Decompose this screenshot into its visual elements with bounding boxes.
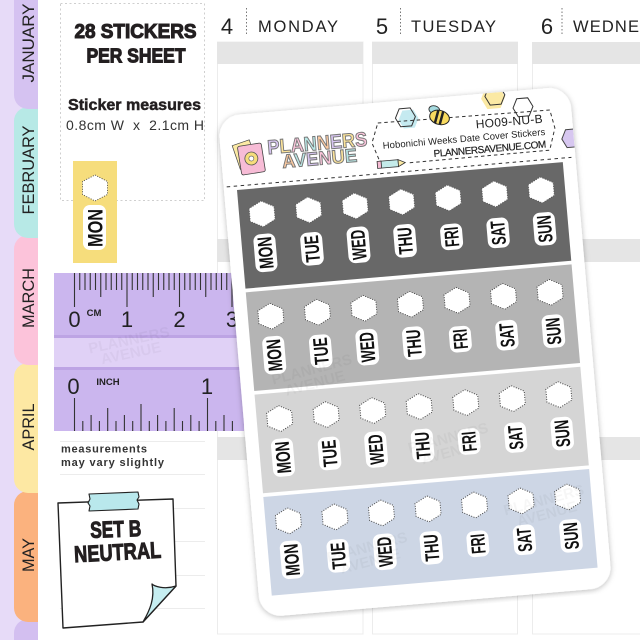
sticker MON xyxy=(275,507,306,580)
sticker SAT xyxy=(508,487,538,556)
sticker MON: MON xyxy=(254,236,279,270)
column: Tuesday: 5 xyxy=(376,14,388,39)
sticker MON: MON xyxy=(272,440,296,474)
sticker THU: THU xyxy=(411,431,436,460)
sticker FRI xyxy=(435,184,465,251)
sticker THU xyxy=(414,495,445,565)
icon: pencil xyxy=(377,159,406,168)
sticker SAT xyxy=(490,282,521,351)
icon: purple hexagon xyxy=(561,128,575,148)
sticker THU: THU xyxy=(420,533,444,562)
sticker SUN xyxy=(545,381,576,451)
sticker SUN: SUN xyxy=(560,521,584,550)
watermarks: AVENUE xyxy=(515,498,579,530)
inch numbers: 0 xyxy=(67,374,80,399)
centimetre numbers xyxy=(68,307,238,332)
heading: stickers per sheet: PER SHEET xyxy=(86,46,186,68)
tab: May xyxy=(14,491,38,622)
sticker SUN xyxy=(528,176,559,246)
tab: April: APRIL xyxy=(19,404,38,450)
sticker WED: WED xyxy=(374,536,398,568)
centimetre numbers: 2 xyxy=(173,307,186,332)
sticker SUN: SUN xyxy=(551,419,575,448)
sidebar background xyxy=(0,0,38,640)
watermarks: PLANNERS xyxy=(406,420,490,457)
watermarks: AVENUE xyxy=(283,368,347,400)
strip 2: mid grey xyxy=(246,264,580,391)
strip 3: light grey xyxy=(255,367,589,493)
inch numbers: 1 xyxy=(201,374,213,399)
product code: HO09-NU-B xyxy=(475,112,543,131)
watermarks: AVENUE xyxy=(339,545,402,578)
sticker FRI xyxy=(452,389,483,456)
sticker SUN: SUN xyxy=(542,317,567,345)
tab: February: FEBRUARY xyxy=(19,126,38,214)
watermarks: PLANNERS xyxy=(502,482,586,519)
sticker SAT: SAT xyxy=(505,425,529,450)
sheet header xyxy=(226,92,575,188)
sticker TUE: TUE xyxy=(310,337,334,365)
sticker TUE: TUE xyxy=(301,234,325,263)
sticker MON xyxy=(257,302,288,375)
centimetre numbers: 0 xyxy=(68,307,81,332)
sticker THU xyxy=(397,290,428,361)
inch ticks xyxy=(74,398,232,431)
sticker THU xyxy=(388,188,419,258)
tab: March: MARCH xyxy=(19,268,38,328)
note text: SET B xyxy=(90,515,142,543)
column: Monday xyxy=(217,8,363,634)
watermarks: PLANNERS xyxy=(270,351,354,389)
logo wordmark xyxy=(268,132,368,168)
text: sticker measures: Sticker measures xyxy=(68,97,201,114)
logo wordmark: AVENUE xyxy=(281,146,358,173)
column: Tuesday: TUESDAY xyxy=(411,18,496,36)
sample sticker xyxy=(73,161,117,263)
planner columns xyxy=(217,8,640,634)
column: Monday: MONDAY xyxy=(258,18,338,36)
label: INCH: INCH xyxy=(96,377,120,388)
sticky note xyxy=(58,492,176,628)
sticker SAT xyxy=(481,180,512,249)
sticker FRI: FRI xyxy=(458,431,482,452)
icon: blue hexagon xyxy=(395,107,419,129)
icon: notebook xyxy=(232,138,266,176)
sticker WED: WED xyxy=(356,331,381,363)
sticker THU: THU xyxy=(403,329,427,357)
sticker SAT: SAT xyxy=(496,322,520,348)
sticker MON xyxy=(266,405,297,477)
icon: outline hexagon xyxy=(512,97,534,117)
tab: February xyxy=(14,107,38,238)
month tabs xyxy=(14,0,38,640)
sticker WED xyxy=(350,294,381,366)
sticker TUE xyxy=(313,401,343,471)
tab: June xyxy=(14,619,38,640)
icon: bee xyxy=(428,105,450,126)
watermark: AVENUE xyxy=(99,339,163,368)
sticker MON: MON xyxy=(263,338,288,372)
product name: Hobonichi Weeks Date Cover Stickers xyxy=(382,127,546,152)
sticker TUE: TUE xyxy=(318,439,343,468)
sticker SAT xyxy=(499,385,529,454)
sticker FRI xyxy=(443,286,474,353)
watermark: PLANNERS xyxy=(87,324,171,357)
curled corner xyxy=(143,584,176,622)
sticker SUN: SUN xyxy=(534,214,558,243)
heading: stickers per sheet xyxy=(74,21,196,68)
sticker WED xyxy=(342,192,373,264)
tab: March xyxy=(14,235,38,365)
sticker TUE xyxy=(304,298,335,369)
dashed tear line xyxy=(227,157,571,187)
sheet backing xyxy=(218,86,612,618)
heading: stickers per sheet: 28 STICKERS xyxy=(74,21,196,43)
dashed label outline xyxy=(370,108,557,166)
tab: January xyxy=(14,0,38,109)
sticker FRI xyxy=(461,491,491,558)
tab: April xyxy=(14,363,38,493)
sticker TUE xyxy=(321,503,352,573)
sticker sheet xyxy=(217,80,620,618)
text: dimensions: 0.8cm W x 2.1cm H xyxy=(66,117,204,133)
watermarks xyxy=(269,332,591,582)
note text: NEUTRAL xyxy=(73,537,162,567)
sticker WED xyxy=(368,499,399,571)
watermarks: AVENUE xyxy=(420,436,483,468)
strip 1: dark grey xyxy=(237,162,571,289)
note text xyxy=(73,515,162,567)
sample sticker: MON xyxy=(84,209,108,247)
strip 4: blue grey xyxy=(263,469,598,596)
sticker WED: WED xyxy=(365,433,389,465)
sticker SUN xyxy=(554,483,585,553)
sticker TUE xyxy=(295,196,326,266)
sticker TUE: TUE xyxy=(327,541,351,570)
sticker WED xyxy=(359,397,390,468)
centimetre numbers: 1 xyxy=(121,307,133,332)
website: PLANNERSAVENUE.COM xyxy=(433,139,547,160)
ruler xyxy=(54,273,244,431)
sticker THU xyxy=(406,393,436,463)
column: Wednesday: WEDNE xyxy=(573,18,639,36)
icon: yellow hexagon xyxy=(481,92,506,110)
centimetre numbers: 3 xyxy=(226,307,238,332)
panel: sticker count and measures xyxy=(60,4,204,200)
sticker MON: MON xyxy=(280,543,305,577)
inch numbers xyxy=(67,374,213,399)
column: Wednesday: 6 xyxy=(541,14,553,39)
sticker THU: THU xyxy=(394,226,418,255)
measurement note: measurements xyxy=(61,444,147,456)
column: Tuesday xyxy=(372,8,518,634)
sticker MON xyxy=(249,200,280,273)
centimetre ticks xyxy=(74,273,237,307)
measurement note xyxy=(60,442,205,608)
column: Wednesday xyxy=(532,8,640,634)
measurement note: may vary slightly xyxy=(61,457,165,469)
column: Monday: 4 xyxy=(221,14,233,39)
tab: January: JANUARY xyxy=(19,4,38,82)
sticker SAT: SAT xyxy=(487,220,511,246)
tab: May: MAY xyxy=(19,538,38,572)
sticker FRI: FRI xyxy=(467,533,491,555)
sticker SUN xyxy=(537,278,567,349)
tape xyxy=(88,492,139,511)
watermarks: PLANNERS xyxy=(325,529,409,567)
label: CM: CM xyxy=(87,308,101,319)
logo wordmark: PLANNERS xyxy=(267,129,368,159)
sticker FRI: FRI xyxy=(450,328,473,350)
sticker SAT: SAT xyxy=(513,527,537,553)
sticker FRI: FRI xyxy=(441,226,464,248)
sticker WED: WED xyxy=(347,229,372,261)
